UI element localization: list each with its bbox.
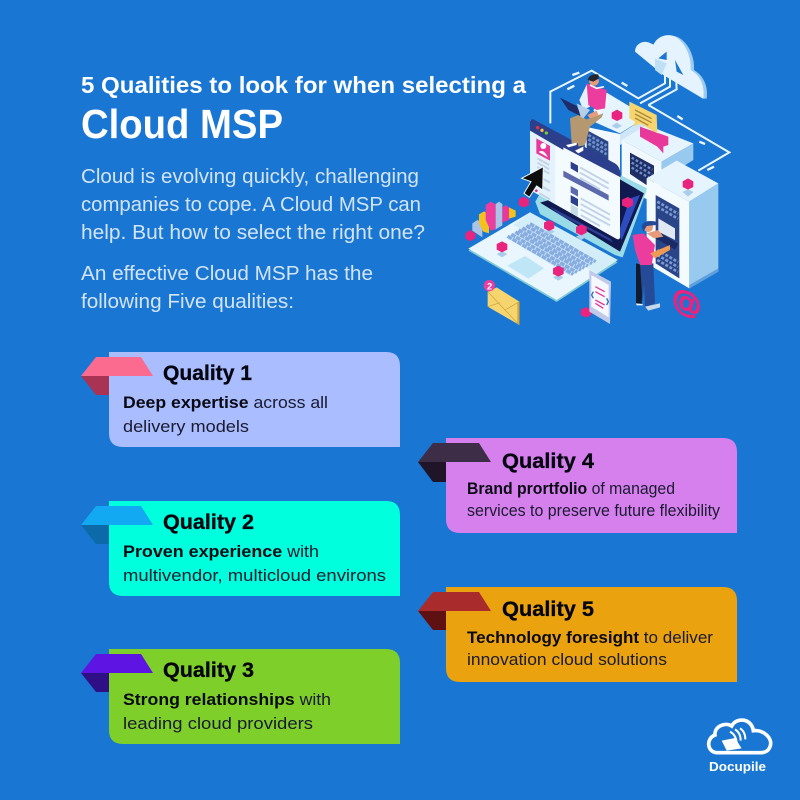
icon: cloud (635, 35, 707, 99)
icon: mail envelope (484, 280, 519, 325)
card: quality 4 (418, 438, 737, 533)
title: Cloud MSP (81, 101, 283, 147)
card: quality 2 (81, 501, 400, 596)
server rack 1 (585, 93, 647, 187)
chat bubbles (629, 102, 668, 153)
icon: mail envelope: 2 (487, 281, 492, 291)
person with laptop (560, 74, 609, 153)
server rack 3 (647, 161, 718, 288)
card: quality 2: Proven experience with (123, 543, 319, 561)
browser window (530, 119, 621, 239)
card: quality 5: Technology foresight to deliver (467, 629, 714, 647)
card: quality 3: Quality 3 (163, 659, 254, 682)
pink data cubes (465, 178, 693, 318)
card: quality 4: Quality 4 (502, 450, 594, 473)
icon: mouse cursor (522, 167, 543, 197)
card: quality 2: multivendor, multicloud environs (123, 567, 386, 585)
card: quality 1: Deep expertise across all (123, 394, 328, 412)
laptop screen (535, 175, 647, 257)
card: quality 3 (81, 649, 400, 744)
icon: phone (589, 270, 611, 324)
card: quality 5: Quality 5 (502, 598, 594, 621)
cube on rack 1 (612, 110, 622, 129)
server rack 2 (622, 125, 693, 207)
logo: Docupile: Docupile (709, 759, 766, 774)
lead-in text: An effective Cloud MSP has the (81, 263, 373, 285)
title (81, 72, 526, 147)
card: quality 2: Quality 2 (163, 511, 254, 534)
card: quality 4: Brand prortfolio of managed (467, 480, 675, 498)
bar chart (472, 202, 516, 237)
laptop base with keyboard (468, 212, 618, 302)
card: quality 1: delivery models (123, 418, 249, 436)
intro paragraph (81, 166, 425, 244)
intro paragraph: help. But how to select the right one? (81, 222, 425, 244)
card: quality 3: leading cloud providers (123, 715, 313, 733)
icon: at sign: @ (672, 280, 701, 325)
title: 5 Qualities to look for when selecting a (81, 72, 526, 98)
card: quality 5 (418, 587, 737, 682)
card: quality 1: Quality 1 (163, 362, 252, 385)
lead-in text: following Five qualities: (81, 291, 294, 313)
card: quality 1 (81, 352, 400, 447)
card: quality 3: Strong relationships with (123, 691, 331, 709)
intro paragraph: companies to cope. A Cloud MSP can (81, 194, 421, 216)
person at server (633, 221, 670, 311)
logo: Docupile (709, 720, 771, 774)
wiring (550, 55, 729, 171)
card: quality 4: services to preserve future flexibility (467, 502, 721, 520)
card: quality 5: innovation cloud solutions (467, 651, 667, 669)
illustration: isometric cloud data centre (465, 35, 729, 325)
intro paragraph: Cloud is evolving quickly, challenging (81, 166, 419, 188)
lead-in text (81, 263, 373, 313)
